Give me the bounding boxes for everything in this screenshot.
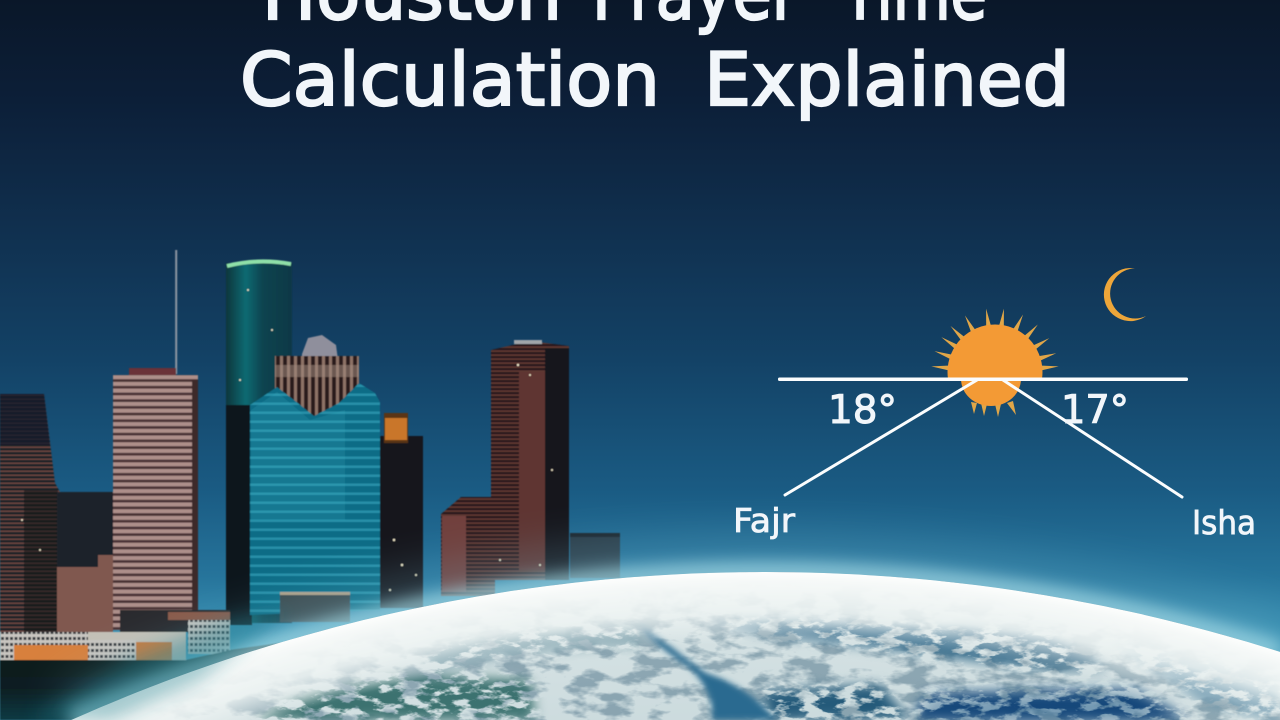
brown tower <box>491 340 569 580</box>
title line 2: Calculation <box>240 38 660 123</box>
Isha label: Isha <box>1192 503 1256 542</box>
pink striped tower <box>113 368 198 630</box>
title line 1, cropped at top edge <box>262 0 987 37</box>
river channel <box>640 626 776 720</box>
soft deep ocean tint <box>920 695 1180 720</box>
sun disc lower half <box>961 379 1021 406</box>
Isha angle line <box>1003 380 1182 497</box>
cloud gaps over ocean and land <box>255 622 1280 720</box>
horizon line <box>778 378 1188 381</box>
ground haze left of the earth <box>30 610 290 720</box>
dark foliage foreground <box>0 640 300 720</box>
Houston skyline <box>0 250 620 720</box>
bright cloud rim <box>71 572 1280 720</box>
icon: crescent moon <box>1104 268 1146 321</box>
title line 2 <box>240 38 1070 123</box>
clouds, oceans and land <box>60 570 1280 720</box>
podium: mid-rise buildings <box>0 610 230 662</box>
sun rays <box>931 308 1059 417</box>
Fajr angle line <box>785 380 977 495</box>
planet earth with cloud cover <box>60 570 1280 720</box>
diagram: sun angle below horizon <box>733 308 1256 542</box>
pink striped tower spire <box>175 250 177 374</box>
dark tower with orange crown <box>378 413 423 608</box>
Fajr angle value: 18° <box>828 388 897 433</box>
teal glass tower with green cap <box>226 261 292 625</box>
icon: sun <box>931 308 1059 420</box>
dark left building <box>0 394 60 632</box>
brown twin-block building, low wing <box>441 497 495 596</box>
Isha angle value: 17° <box>1061 388 1129 433</box>
title line 2: Explained <box>704 38 1070 123</box>
fine cloud shading <box>60 570 1280 720</box>
stepped crown building with dome <box>275 335 359 416</box>
window lights <box>21 289 553 591</box>
atmosphere glow along the horizon <box>71 572 1280 720</box>
earth disc <box>71 572 1280 720</box>
sun disc upper half <box>948 324 1042 378</box>
title <box>240 0 1070 123</box>
far right low building <box>570 533 620 578</box>
low dark block with tan base <box>57 492 113 632</box>
aqua glass skyscraper <box>250 383 380 622</box>
Fajr label: Fajr <box>733 501 795 540</box>
